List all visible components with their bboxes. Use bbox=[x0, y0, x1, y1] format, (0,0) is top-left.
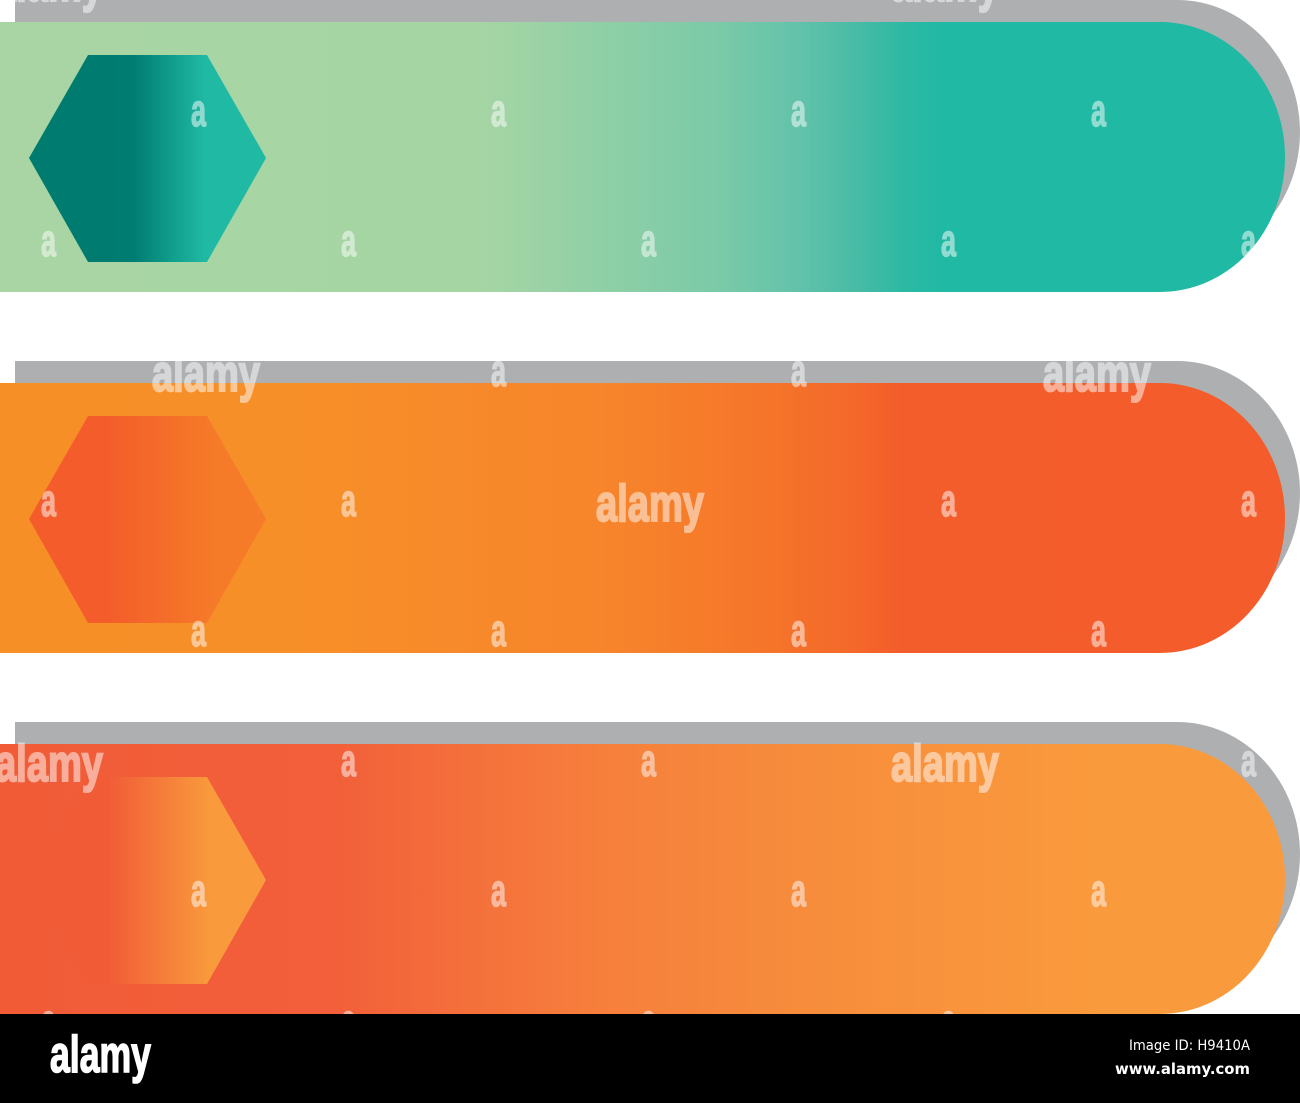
banner: green to teal bbox=[0, 22, 1285, 292]
watermark layer: a bbox=[1091, 605, 1107, 656]
footer bar bbox=[0, 1014, 1300, 1103]
watermark layer: a bbox=[1091, 865, 1107, 916]
watermark layer: alamy bbox=[1043, 345, 1151, 403]
website: www.alamy.com bbox=[1115, 1060, 1250, 1078]
banner shadow: middle bbox=[15, 361, 1300, 625]
watermark layer: a bbox=[191, 865, 207, 916]
banner: orange to red bbox=[0, 383, 1285, 653]
watermark layer: alamy bbox=[891, 735, 999, 793]
banner shadow: bottom bbox=[15, 722, 1300, 986]
watermark layer: a bbox=[41, 475, 57, 526]
watermark layer: alamy bbox=[596, 475, 704, 533]
banner: red to light orange bbox=[0, 744, 1285, 1014]
watermark layer: a bbox=[1241, 735, 1257, 786]
watermark layer: a bbox=[941, 995, 957, 1046]
watermark layer: a bbox=[341, 475, 357, 526]
watermark layer: a bbox=[641, 735, 657, 786]
watermark layer: a bbox=[1241, 475, 1257, 526]
watermark layer: a bbox=[341, 995, 357, 1046]
watermark layer: a bbox=[1241, 215, 1257, 266]
watermark layer: a bbox=[341, 735, 357, 786]
hexagon: orange bbox=[29, 416, 266, 623]
watermark layer: alamy bbox=[152, 345, 260, 403]
watermark layer: a bbox=[791, 605, 807, 656]
banner shadow: top bbox=[15, 0, 1300, 264]
hexagon: teal bbox=[29, 55, 266, 262]
watermark layer: a bbox=[491, 605, 507, 656]
watermark layer: a bbox=[941, 215, 957, 266]
hexagon: red to light orange bbox=[29, 777, 266, 984]
watermark layer: a bbox=[491, 345, 507, 396]
watermark layer: a bbox=[791, 85, 807, 136]
watermark layer: a bbox=[341, 215, 357, 266]
watermark layer: a bbox=[41, 995, 57, 1046]
watermark layer: a bbox=[491, 865, 507, 916]
watermark layer: a bbox=[191, 605, 207, 656]
footer logo: alamy bbox=[50, 1026, 151, 1084]
watermark layer: a bbox=[941, 475, 957, 526]
watermark layer: a bbox=[191, 85, 207, 136]
watermark layer: a bbox=[491, 85, 507, 136]
watermark layer: a bbox=[41, 215, 57, 266]
image id: Image ID: H9410A bbox=[1129, 1038, 1250, 1054]
watermark layer: a bbox=[791, 865, 807, 916]
watermark layer: a bbox=[641, 995, 657, 1046]
watermark layer: a bbox=[1091, 85, 1107, 136]
watermark layer: a bbox=[641, 215, 657, 266]
watermark layer: a bbox=[791, 345, 807, 396]
